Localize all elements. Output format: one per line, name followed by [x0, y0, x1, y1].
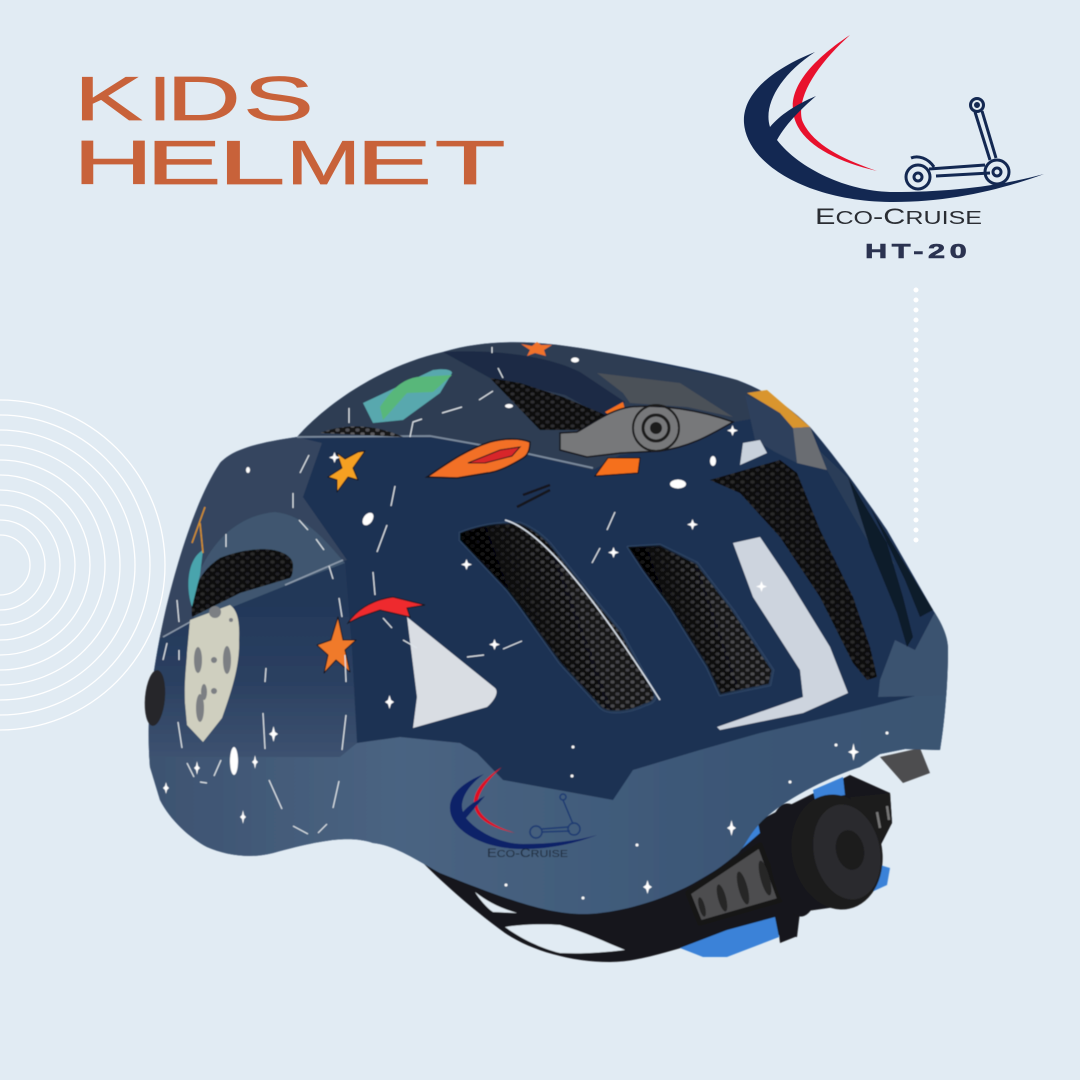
logo red swoosh — [793, 35, 877, 171]
model name: HT-20 — [865, 239, 971, 263]
ledge highlight — [297, 436, 593, 468]
vent rim highlight — [505, 520, 660, 700]
lower lighter band — [140, 685, 960, 920]
title: T — [435, 128, 506, 198]
adjustment dial — [688, 786, 893, 943]
gloss reflection: shoulder — [740, 440, 767, 465]
rocket graphic — [560, 402, 733, 476]
crease line — [163, 560, 343, 637]
title: S — [243, 64, 314, 134]
star and dash speckles — [163, 358, 888, 900]
title — [73, 64, 506, 198]
vent: narrow far right — [870, 507, 933, 617]
title: K — [74, 64, 142, 134]
gloss reflection: right strip — [717, 537, 848, 730]
brand logo — [744, 35, 1044, 229]
vent: small top — [320, 426, 403, 437]
vent: center second — [628, 545, 773, 695]
title: E — [146, 128, 222, 198]
title: I — [148, 64, 172, 134]
logo wordmark: E CO -C RUISE — [815, 204, 982, 229]
dial ridge — [781, 786, 893, 918]
title: M — [286, 128, 361, 198]
grey gloss streak — [597, 373, 733, 417]
rocket flame — [427, 439, 530, 478]
title: D — [167, 64, 241, 134]
title: H — [73, 128, 153, 198]
star: orange — [317, 617, 356, 673]
left slate panel — [158, 437, 347, 640]
dotted vertical line — [914, 290, 918, 542]
title: E — [356, 128, 432, 198]
helmet shell — [149, 342, 948, 914]
logo navy crescent — [744, 52, 1044, 202]
slate right shoulder — [746, 397, 796, 462]
blue straps — [680, 777, 890, 957]
concentric circles decoration — [0, 400, 165, 730]
vent: left — [192, 549, 293, 617]
star: top orange — [521, 342, 552, 356]
upper dome panel — [297, 342, 780, 470]
lower left panel — [140, 562, 357, 757]
motion lines — [517, 485, 550, 507]
small logo wordmark: ECO -C RUISE — [487, 846, 568, 860]
star: yellow — [328, 451, 365, 492]
vent: narrow right — [848, 477, 913, 647]
vent: right large — [710, 460, 877, 680]
icon: scooter — [906, 98, 1009, 189]
arch panel over left vent — [190, 512, 345, 622]
vents — [192, 378, 933, 712]
side knob — [143, 669, 167, 727]
dark top of dome — [443, 351, 625, 420]
helmet photo illustration — [140, 342, 960, 962]
rear foam tip — [880, 748, 930, 783]
rear harness — [420, 775, 892, 962]
planet graphic — [363, 369, 452, 423]
dial collar — [762, 800, 826, 920]
dial face — [805, 798, 889, 906]
moon — [185, 605, 239, 742]
small helmet logo — [450, 767, 597, 860]
vent: top — [490, 378, 610, 430]
bracket loop — [777, 913, 797, 943]
comet — [348, 597, 425, 623]
back ratchet — [850, 793, 892, 843]
alien — [188, 507, 205, 607]
gloss reflection: triangle — [407, 617, 497, 728]
title: L — [218, 128, 286, 198]
right side panel — [878, 612, 952, 697]
dial handle — [688, 845, 780, 923]
top right orange patch — [747, 390, 827, 470]
vent: center large — [460, 523, 655, 712]
